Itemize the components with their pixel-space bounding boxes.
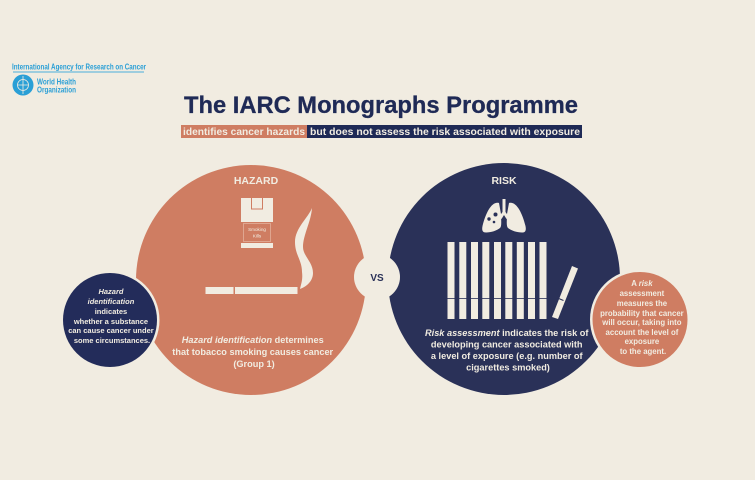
logo: IARC and WHO (12, 62, 147, 96)
icon: cigarette pack: Kills (253, 234, 262, 238)
subtitle banner: identifies cancer hazards (183, 126, 305, 138)
icon: cigarette pack (241, 198, 273, 248)
text: hazard identification: that tobacco smoking causes cancer (172, 347, 334, 357)
title: The IARC Monographs Programme (184, 92, 578, 119)
text: risk assessment: Risk assessment indicates the risk of (425, 328, 588, 338)
logo: IARC and WHO: Organization (37, 86, 76, 94)
callout: hazard identification: indicates (95, 307, 127, 316)
callout: hazard identification: identification (88, 297, 135, 306)
badge: vs: VS (370, 273, 384, 284)
callout: risk assessment: account the level of (606, 328, 679, 337)
callout: hazard identification: Hazard (98, 287, 124, 296)
callout: hazard identification: can cause cancer under (68, 326, 154, 335)
callout: risk assessment (590, 270, 690, 370)
icon: lungs (482, 199, 526, 232)
callout: risk assessment: measures the (617, 299, 668, 308)
callout: risk assessment: exposure (625, 337, 660, 346)
logo: IARC and WHO: International Agency for Research on Cancer (12, 62, 147, 72)
callout: hazard identification: whether a substance (73, 317, 148, 326)
text: risk assessment: developing cancer associated with (431, 340, 583, 350)
icon: row of cigarettes (447, 242, 547, 319)
callout: risk assessment: assessment (620, 289, 665, 298)
panel: risk (388, 163, 620, 395)
panel: hazard (136, 165, 366, 395)
callout: hazard identification: some circumstances. (74, 336, 150, 345)
callout: hazard identification (60, 270, 160, 370)
text: hazard identification: Hazard identification determines (182, 335, 324, 345)
icon: smoke (295, 208, 313, 289)
text: risk assessment: cigarettes smoked) (466, 362, 550, 372)
callout: risk assessment: to the agent. (620, 347, 666, 356)
logo: IARC and WHO: World Health (37, 78, 76, 86)
text: risk assessment: a level of exposure (e.g. number of (431, 351, 583, 361)
badge: vs (354, 254, 400, 300)
subtitle banner (181, 125, 582, 138)
text: hazard identification: (Group 1) (233, 359, 275, 369)
heading: risk: RISK (491, 175, 517, 187)
callout: risk assessment: will occur, taking into (601, 318, 682, 327)
heading: hazard: HAZARD (234, 175, 279, 187)
icon: cigarette (206, 287, 298, 294)
icon: single tilted cigarette (552, 266, 578, 319)
callout: risk assessment: A risk (631, 279, 653, 288)
subtitle banner: but does not assess the risk associated with exposure (310, 126, 580, 138)
callout: risk assessment: probability that cancer (600, 309, 684, 318)
icon: cigarette pack: Smoking (248, 227, 266, 232)
